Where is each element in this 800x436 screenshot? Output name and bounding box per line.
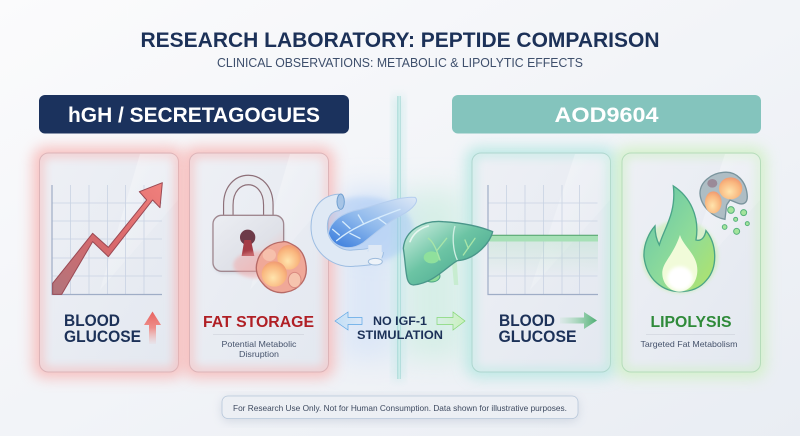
header: hGH / Secretagogues: hGH / SECRETAGOGUES: [68, 104, 320, 127]
label: blood glucose: BLOOD: [64, 312, 120, 330]
arrow: green right: [437, 312, 465, 330]
text: potential metabolic disruption: Potential Metabolic: [222, 339, 297, 349]
arrow: blue left: [335, 312, 362, 330]
icon: red rising arrow: [53, 183, 162, 294]
icon: up arrow: [144, 312, 161, 344]
label: blood glucose: BLOOD: [499, 312, 555, 330]
footer disclaimer: [222, 396, 578, 421]
panel: hGH blood glucose: [33, 147, 184, 378]
icon: flame: [642, 186, 718, 293]
icon: flat arrow: [560, 312, 597, 329]
icon: fat cell breaking apart: [700, 172, 749, 234]
label: no IGF-1 stimulation: NO IGF-1: [373, 314, 427, 328]
panel: fat storage: [183, 147, 334, 378]
text: targeted fat metabolism: Targeted Fat Metabolism: [640, 339, 738, 349]
center divider: [393, 96, 404, 380]
header: hGH / Secretagogues: [39, 95, 349, 134]
icon: pancreas: [313, 194, 416, 265]
header: AOD9604: [452, 95, 761, 134]
panel: AOD9604 blood glucose: [466, 147, 616, 378]
label: fat storage: FAT STORAGE: [203, 314, 314, 331]
text: potential metabolic disruption: Disruption: [239, 349, 279, 359]
footer disclaimer: For Research Use Only. Not for Human Consumption. Data shown for illustrative purposes.: [233, 403, 567, 413]
subtitle: CLINICAL OBSERVATIONS: METABOLIC & LIPOLYTIC EFFECTS: [217, 56, 583, 70]
header: AOD9604: AOD9604: [554, 104, 659, 127]
title: RESEARCH LABORATORY: PEPTIDE COMPARISON: [140, 28, 660, 52]
line chart: rising glucose: [52, 183, 162, 294]
icon: liver: [403, 221, 493, 285]
label: blood glucose: GLUCOSE: [64, 328, 141, 346]
panel: lipolysis: [616, 147, 766, 378]
line chart: stable glucose: [488, 185, 598, 294]
label: no IGF-1 stimulation: STIMULATION: [357, 328, 443, 342]
label: blood glucose: GLUCOSE: [498, 328, 576, 346]
label: lipolysis: LIPOLYSIS: [650, 314, 732, 331]
icon: padlock with fat cell: [213, 180, 306, 293]
